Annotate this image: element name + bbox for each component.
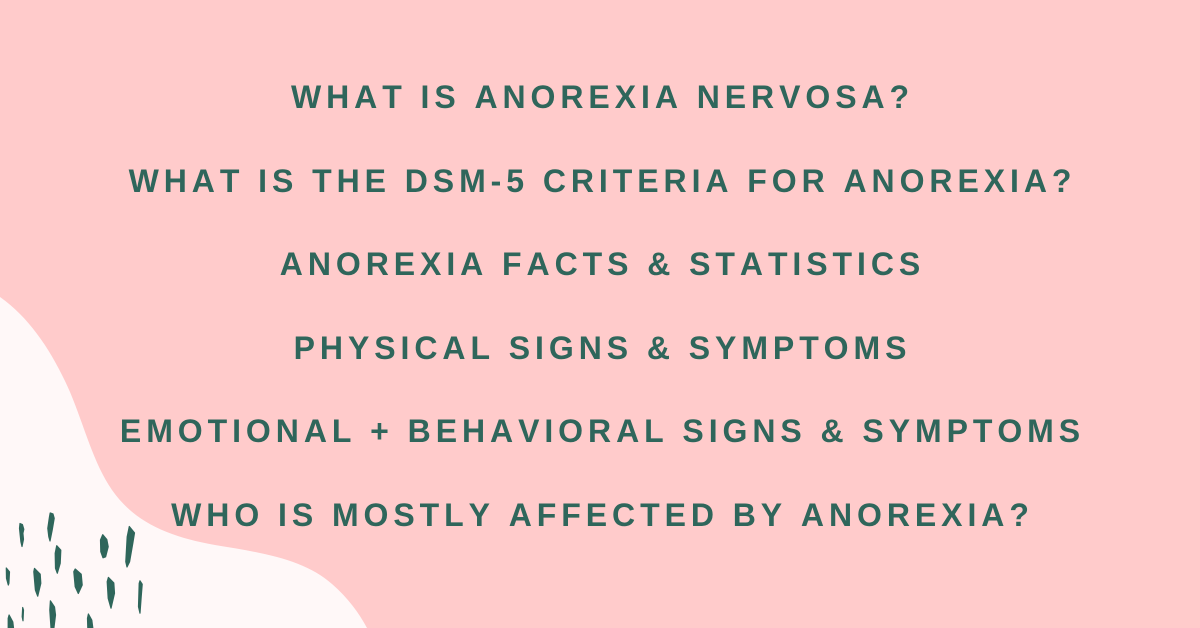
brush marks: [6, 513, 142, 628]
heading: DSM-5 criteria: WHAT IS THE DSM-5 CRITERIA FOR ANOREXIA?: [129, 163, 1076, 199]
heading: who is affected: WHO IS MOSTLY AFFECTED BY ANOREXIA?: [171, 497, 1034, 533]
white blob: [0, 297, 367, 628]
heading: facts and statistics: ANOREXIA FACTS & STATISTICS: [280, 246, 925, 282]
heading: what is anorexia nervosa: WHAT IS ANOREXIA NERVOSA?: [291, 79, 914, 115]
heading: emotional and behavioral signs: EMOTIONAL + BEHAVIORAL SIGNS & SYMPTOMS: [120, 413, 1085, 449]
heading: physical signs: PHYSICAL SIGNS & SYMPTOMS: [294, 330, 911, 366]
